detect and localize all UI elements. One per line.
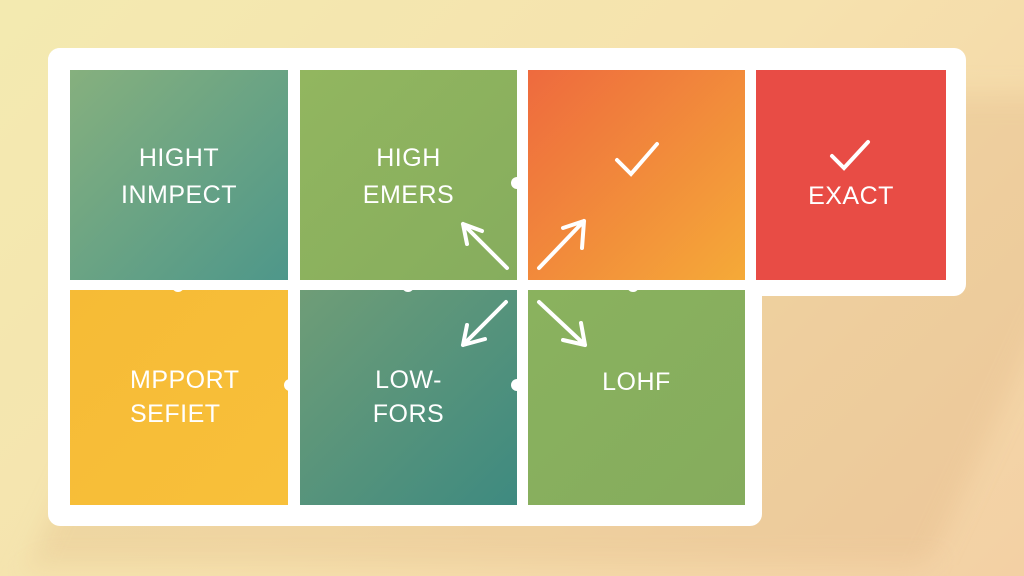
cell: orange check	[528, 70, 745, 280]
panel: board	[48, 48, 966, 526]
cell: exact: EXACT	[808, 182, 894, 210]
cell: lohf	[528, 290, 745, 505]
cell: support	[70, 290, 288, 505]
cell: low fors: LOW-	[375, 366, 442, 394]
cell: support: MPPORT	[130, 366, 240, 394]
cell: high emers: HIGH	[376, 144, 441, 172]
cell: exact	[756, 70, 946, 280]
cell: low fors	[300, 290, 517, 505]
cell: high impact	[70, 70, 288, 280]
cell: high emers: EMERS	[363, 181, 454, 209]
cell: high impact: HIGHT	[139, 144, 219, 172]
shadow	[29, 95, 1024, 565]
cell: lohf: LOHF	[602, 368, 671, 396]
cell: high impact: INMPECT	[121, 181, 237, 209]
cell: high emers	[300, 70, 517, 280]
cell: low fors: FORS	[373, 400, 444, 428]
cell: support: SEFIET	[130, 400, 221, 428]
